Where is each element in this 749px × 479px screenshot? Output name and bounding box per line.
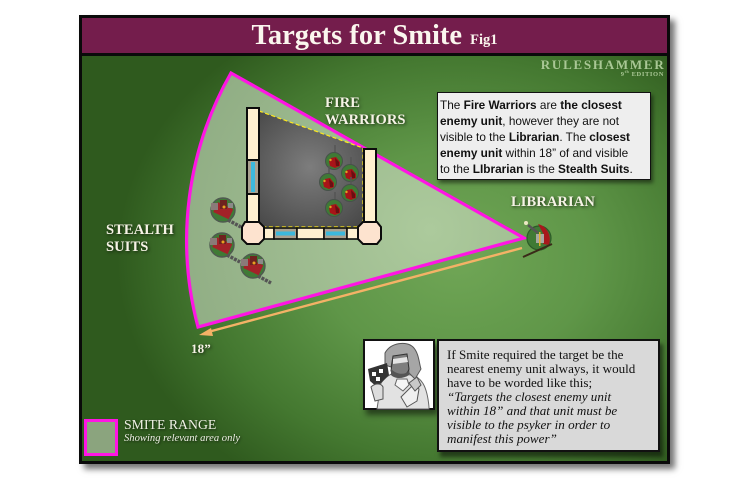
left wall	[247, 108, 259, 224]
corner towers	[242, 222, 264, 244]
label: librarian: LIBRARIAN	[511, 194, 595, 210]
label: stealth suits	[106, 222, 176, 254]
librarian model	[523, 221, 552, 257]
label: stealth suits: SUITS	[106, 238, 148, 254]
legend: smite range	[84, 417, 242, 456]
explanation callout: enemy unit within 18” of and visible	[440, 146, 628, 160]
title banner	[82, 18, 667, 56]
quote callout	[437, 339, 660, 452]
fire warriors unit	[320, 145, 358, 216]
legend text: Showing relevant area only	[124, 433, 240, 444]
explanation callout: to the LIbrarian is the Stealth Suits.	[440, 162, 633, 176]
quote callout: nearest enemy unit always, it would	[447, 361, 635, 376]
ruined building	[242, 108, 381, 244]
legend swatch	[84, 419, 118, 456]
label: fire warriors: FIRE	[325, 95, 360, 111]
explanation callout: The Fire Warriors are the closest	[440, 98, 622, 112]
bottom wall	[264, 228, 358, 239]
portrait icon: judge	[362, 339, 437, 418]
building interior: hidden area	[259, 111, 363, 227]
infographic frame	[79, 15, 670, 464]
explanation callout: visible to the Librarian. The closest	[440, 130, 630, 144]
quote callout: within 18” and that unit must be	[447, 403, 617, 418]
legend text: SMITE RANGE	[124, 417, 216, 432]
quote callout: If Smite required the target be the	[447, 347, 623, 362]
quote callout: have to be worded like this;	[447, 375, 592, 390]
label: fire warriors: WARRIORS	[325, 112, 406, 128]
explanation callout	[437, 92, 651, 180]
title banner: Targets for Smite Fig1	[251, 20, 498, 51]
label: 18 inch: 18”	[191, 341, 211, 356]
brand mark: Ruleshammer: 9th EDITION	[621, 69, 664, 78]
quote callout: “Targets the closest enemy unit	[447, 389, 611, 404]
stealth suits unit	[210, 198, 271, 283]
brand mark: Ruleshammer: RULESHAMMER	[541, 57, 666, 72]
label: fire warriors	[325, 95, 408, 128]
quote callout: visible to the psyker in order to	[447, 417, 610, 432]
legend text	[124, 417, 242, 445]
right wall	[364, 149, 376, 223]
18 inch range arrow	[199, 248, 522, 336]
quote callout: manifest this power”	[447, 431, 557, 446]
smite range wedge	[187, 73, 524, 327]
explanation callout: enemy unit, however they are not	[440, 114, 619, 128]
label: stealth suits: STEALTH	[106, 222, 174, 238]
